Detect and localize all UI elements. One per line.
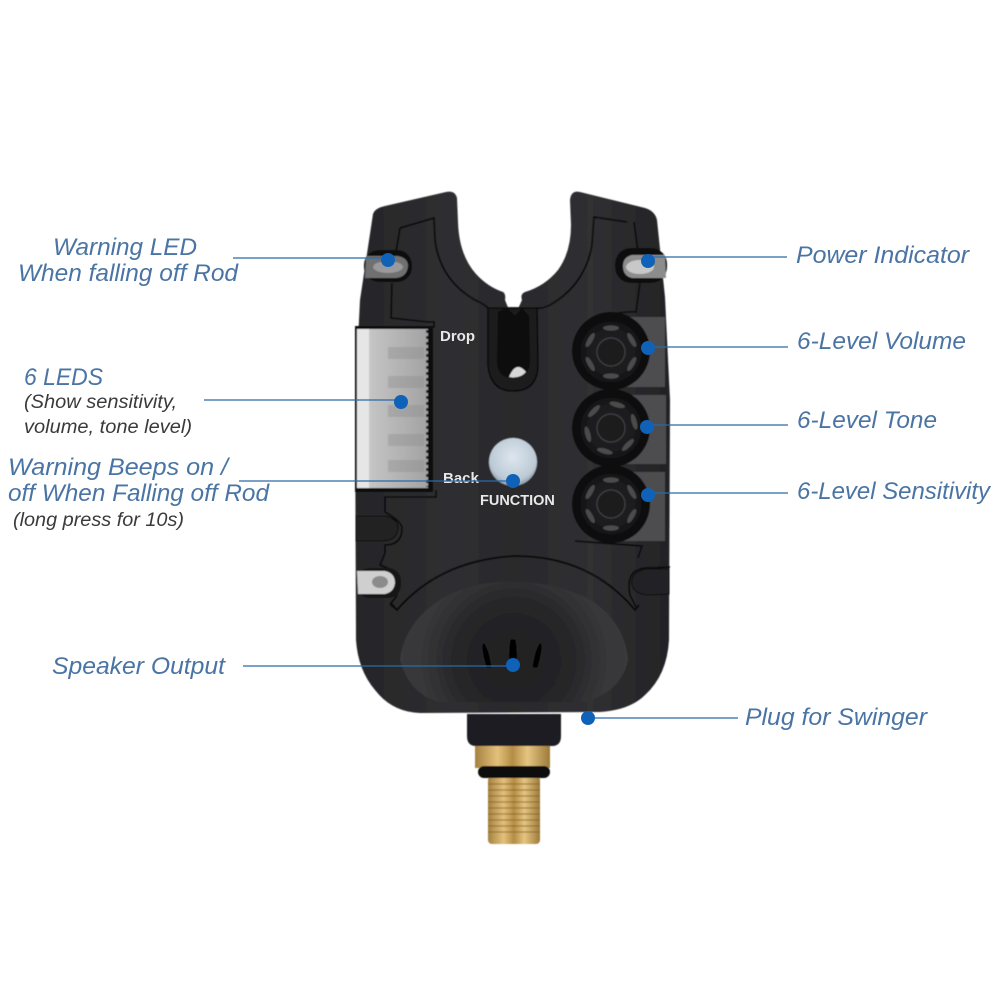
- callout: warning LED: [18, 234, 395, 287]
- callout: speaker output: [52, 653, 520, 680]
- slot: [497, 308, 530, 378]
- speaker slots: [482, 639, 542, 672]
- callout: 6-level sensitivity: [641, 478, 992, 505]
- callout: plug for swinger: Plug for Swinger: [745, 704, 928, 731]
- callout: warning beeps: Warning Beeps on /: [8, 454, 230, 481]
- callout: warning beeps: off When Falling off Rod: [8, 480, 270, 507]
- callout: plug for swinger: [581, 704, 928, 731]
- callout: 6-level tone: [640, 407, 937, 434]
- label: Drop: Drop: [440, 328, 475, 345]
- callout: 6 LEDs: volume, tone level): [24, 417, 192, 438]
- label: FUNCTION: FUNCTION: [480, 493, 555, 509]
- brass knurled nut: [475, 746, 550, 768]
- callout: warning beeps: [8, 454, 520, 531]
- callout: 6 LEDs: [24, 364, 408, 438]
- rubber o-ring: [478, 766, 550, 778]
- callout: speaker output: Speaker Output: [52, 653, 226, 680]
- black collar: [467, 714, 561, 746]
- label: Back: Back: [443, 470, 480, 487]
- callout: 6-level volume: 6-Level Volume: [797, 328, 966, 355]
- button: volume: [572, 312, 650, 390]
- speaker arc: [390, 556, 639, 610]
- top left led: [364, 250, 412, 282]
- callout: warning beeps: (long press for 10s): [13, 510, 184, 531]
- grip notch left: [356, 516, 398, 541]
- button: tone: [572, 389, 650, 467]
- bottom led: [357, 568, 401, 598]
- callout: warning LED: When falling off Rod: [18, 260, 239, 287]
- right grip notch: [632, 569, 669, 595]
- callout: warning LED: Warning LED: [53, 234, 197, 261]
- callout: 6-level tone: 6-Level Tone: [797, 407, 937, 434]
- top right led: [615, 248, 667, 283]
- function button: [489, 438, 537, 486]
- device: bite alarm: [355, 192, 670, 844]
- speaker dome: [400, 582, 628, 702]
- slot surround: [488, 308, 538, 391]
- slot highlight: [509, 367, 526, 377]
- callout: 6-level volume: [641, 328, 966, 355]
- moulded panel lines: [380, 217, 670, 610]
- button bays: [612, 317, 666, 541]
- callout: 6 LEDs: 6 LEDS: [24, 364, 103, 391]
- 6 led window: [355, 326, 433, 492]
- callout: 6-level sensitivity: 6-Level Sensitivity: [797, 478, 992, 505]
- threaded brass stud: [488, 776, 540, 844]
- callout: power indicator: [641, 242, 970, 269]
- button: sensitivity: [572, 465, 650, 543]
- callout: 6 LEDs: (Show sensitivity,: [24, 392, 177, 413]
- housing: [355, 192, 670, 713]
- callout: power indicator: Power Indicator: [796, 242, 970, 269]
